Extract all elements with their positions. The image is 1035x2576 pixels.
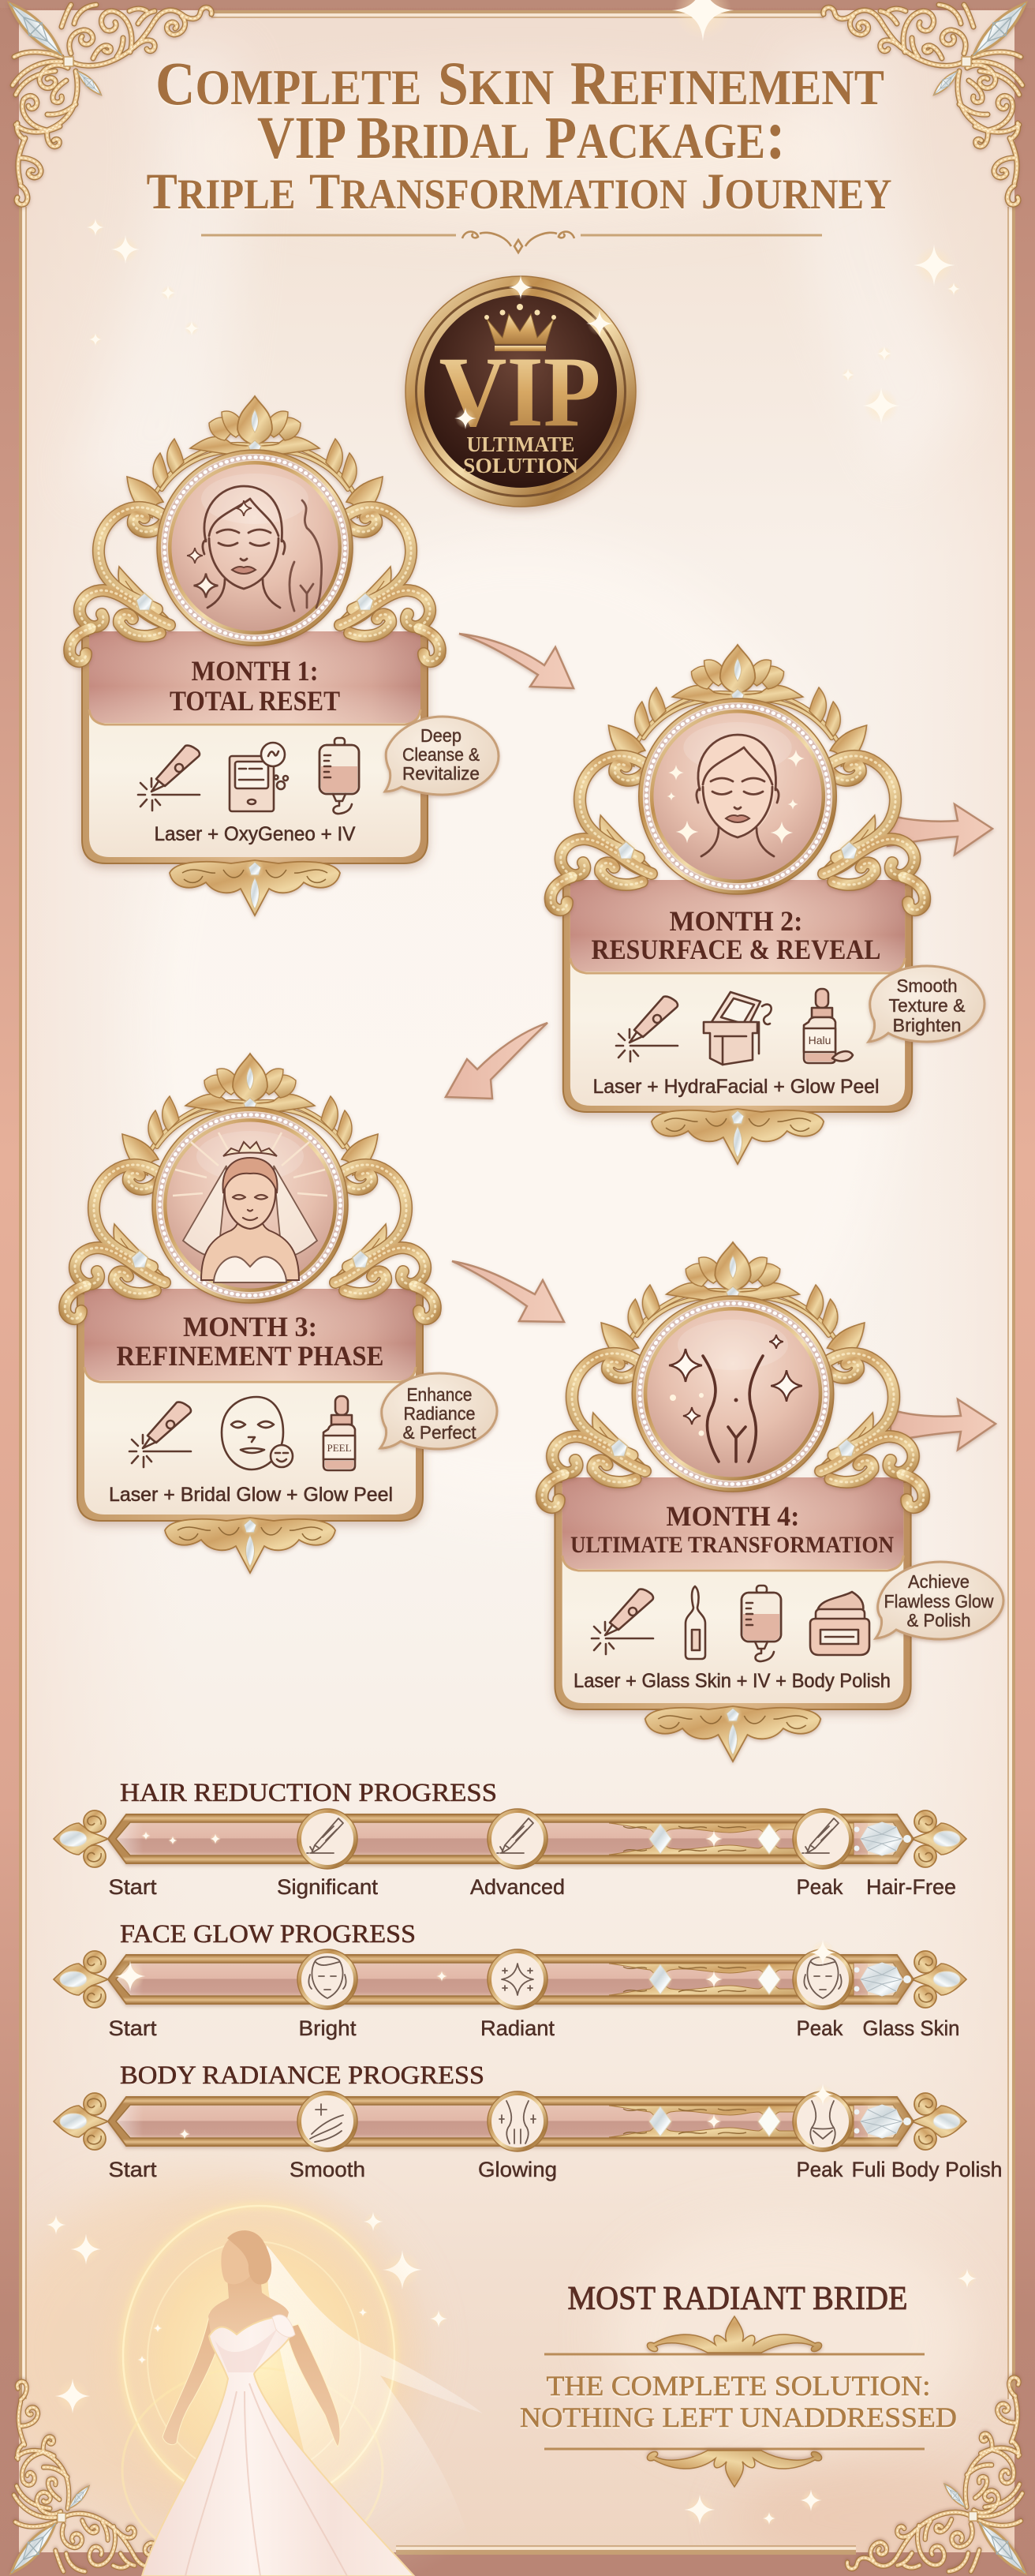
ornament divider: lower [544, 2449, 925, 2487]
heading: month 4: ULTIMATE TRANSFORMATION [570, 1532, 894, 1558]
progress labels: Hair-Free [866, 1875, 956, 1899]
icon: laser [138, 746, 200, 811]
progress labels: Start [109, 2158, 157, 2181]
progress labels [109, 1875, 956, 1899]
icon: laser [129, 1402, 191, 1467]
treatment label: Laser + Glass Skin + IV + Body Polish [574, 1670, 891, 1692]
progress: hair reduction [54, 1779, 966, 1899]
heading: month 3: REFINEMENT PHASE [117, 1340, 383, 1372]
progress labels: Peak [797, 2016, 843, 2040]
medallion illustration: bride [173, 1133, 327, 1282]
treatment label: Laser + Bridal Glow + Glow Peel [109, 1484, 393, 1506]
icon: face mask [222, 1397, 293, 1470]
arrow: month 1 to month 2 [459, 634, 574, 688]
icon: crown [484, 304, 556, 351]
progress labels: Fuli Body Polish [852, 2158, 1002, 2181]
icon: laser [616, 997, 678, 1061]
treatment label: Laser + OxyGeneo + IV [155, 823, 356, 845]
icon: peel bottle: PEEL [327, 1442, 352, 1454]
callout: achieve flawless: & Polish [907, 1610, 970, 1631]
callout: deep cleanse [385, 717, 499, 795]
closing tagline: THE COMPLETE SOLUTION: [546, 2370, 931, 2402]
heading: month 1 [170, 655, 340, 717]
progress: body radiance [54, 2061, 1002, 2181]
title: Complete Skin Refinement [155, 39, 884, 120]
progress: face glow [54, 1920, 966, 2040]
icon: IV bag [742, 1586, 781, 1661]
progress title: BODY RADIANCE PROGRESS [120, 2061, 484, 2090]
medallion illustration: glowing face [667, 735, 805, 856]
icon: peel bottle [323, 1396, 355, 1470]
callout: achieve flawless: Achieve [908, 1571, 970, 1592]
progress labels: Advanced [470, 1875, 565, 1899]
callout: deep cleanse: Cleanse & [402, 744, 480, 765]
progress bar [54, 1939, 966, 2009]
callout: smooth texture [869, 966, 985, 1042]
corner ornament: top right [824, 0, 1032, 204]
progress labels [109, 2016, 959, 2040]
heading: month 3: MONTH 3: [183, 1311, 317, 1342]
progress labels: Bright [298, 2016, 357, 2040]
progress labels [109, 2158, 1002, 2181]
callout: smooth texture: Brighten [893, 1015, 961, 1035]
callout: deep cleanse: Revitalize [402, 763, 480, 784]
veil [267, 2245, 483, 2576]
heading: month 2: RESURFACE & REVEAL [592, 934, 880, 965]
VIP lettering: VIP [439, 337, 601, 447]
panel: month 1 [69, 396, 499, 915]
callout: enhance radiance [380, 1373, 497, 1449]
progress labels: Significant [277, 1875, 379, 1899]
progress title: FACE GLOW PROGRESS [120, 1920, 416, 1949]
figure [142, 2230, 414, 2576]
heading: month 1: TOTAL RESET [170, 685, 340, 717]
heading: month 3 [117, 1311, 383, 1372]
arrow: month 2 exit [887, 804, 992, 855]
treatment label: Laser + HydraFacial + Glow Peel [593, 1076, 879, 1098]
callout: smooth texture: Texture & [888, 995, 966, 1016]
title divider [201, 232, 822, 253]
ornament divider: upper [544, 2316, 925, 2354]
icon: IV bag [319, 738, 359, 814]
medallion illustration: face and body [187, 486, 322, 611]
callout: enhance radiance: Enhance [407, 1384, 472, 1405]
progress labels: Glowing [478, 2158, 557, 2181]
panel: month 2 [551, 645, 985, 1164]
closing tagline: NOTHING LEFT UNADDRESSED [520, 2402, 957, 2433]
icon: laser [592, 1589, 653, 1654]
corner ornament: bottom right [847, 2377, 1031, 2576]
callout: enhance radiance: & Perfect [402, 1422, 476, 1443]
arrow: month 2 to month 3 [446, 1023, 547, 1099]
progress title: HAIR REDUCTION PROGRESS [120, 1779, 497, 1807]
callout: deep cleanse: Deep [420, 725, 461, 746]
title [147, 39, 891, 222]
icon: OxyGeneo device [230, 743, 288, 811]
progress labels: Smooth [290, 2158, 365, 2181]
progress labels: Glass Skin [863, 2016, 959, 2040]
progress labels: Start [109, 1875, 157, 1899]
progress labels: Radiant [480, 2016, 555, 2040]
corner ornament: bottom left [6, 2382, 183, 2576]
progress labels: Start [109, 2016, 157, 2040]
illustration: radiant bride [85, 2170, 483, 2576]
progress bar [54, 1809, 966, 1869]
icon: body polish jar [810, 1592, 869, 1655]
arrow: month 4 exit [891, 1399, 996, 1450]
heading: month 2 [592, 905, 880, 965]
progress labels: Peak [797, 1875, 843, 1899]
panel: month 3 [65, 1054, 497, 1573]
medallion illustration: torso [669, 1335, 802, 1462]
icon: serum bottle: Halu [809, 1034, 831, 1046]
panel: month 4 [542, 1242, 1003, 1762]
title: Triple Transformation Journey [147, 154, 891, 222]
callout: achieve flawless [876, 1562, 1003, 1639]
closing heading: most radiant bride: MOST RADIANT BRIDE [568, 2281, 907, 2317]
icon: HydraFacial machine [704, 992, 772, 1065]
heading: month 4: MONTH 4: [666, 1500, 800, 1532]
heading: month 4 [570, 1500, 894, 1558]
progress bar [54, 2084, 966, 2151]
closing tagline [520, 2370, 957, 2433]
VIP badge [405, 275, 636, 507]
arrow: month 3 to month 4 [452, 1261, 564, 1322]
halo [85, 2170, 432, 2573]
VIP badge: SOLUTION [463, 454, 579, 477]
title: VIP Bridal Package: [257, 95, 786, 174]
heading: month 1: MONTH 1: [191, 655, 319, 687]
progress labels: Peak [797, 2158, 843, 2181]
icon: serum bottle [804, 989, 853, 1063]
heading: month 2: MONTH 2: [669, 905, 803, 937]
VIP badge: ULTIMATE [467, 432, 574, 456]
callout: enhance radiance: Radiance [404, 1403, 475, 1424]
callout: smooth texture: Smooth [896, 975, 958, 996]
icon: ampoule [686, 1586, 705, 1659]
corner ornament: top left [3, 0, 211, 204]
callout: achieve flawless: Flawless Glow [884, 1591, 994, 1612]
